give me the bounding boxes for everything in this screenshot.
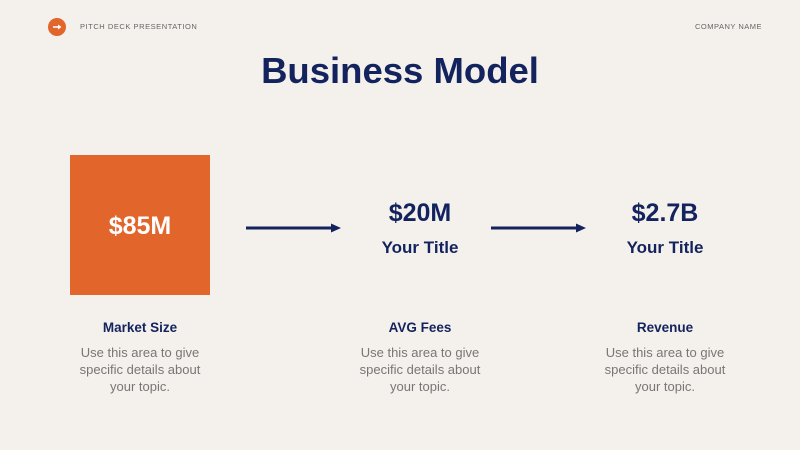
arrow 2 (491, 224, 586, 232)
text block: revenue: specific details about (605, 362, 725, 377)
text block: revenue: your topic. (635, 379, 695, 394)
subtitle 1: Your Title (382, 238, 458, 257)
text block: avg fees (360, 320, 480, 394)
panel: market size (70, 155, 210, 295)
text block: revenue: Revenue (637, 320, 693, 335)
subtitle 2: Your Title (627, 238, 703, 257)
text block: market size: Market Size (103, 320, 177, 335)
text block: market size: Use this area to give (81, 345, 199, 360)
header label: PITCH DECK PRESENTATION (80, 22, 197, 31)
value: $85M (109, 212, 171, 240)
text block: avg fees: specific details about (360, 362, 480, 377)
title: Business Model (261, 50, 539, 91)
text block: avg fees: Use this area to give (361, 345, 479, 360)
text block: market size: specific details about (80, 362, 200, 377)
text block: avg fees: your topic. (390, 379, 450, 394)
text block: avg fees: AVG Fees (389, 320, 451, 335)
value: $20M: $20M (389, 199, 451, 227)
icon: header arrow circle (48, 18, 66, 36)
text block: market size: your topic. (110, 379, 170, 394)
value: $2.7B: $2.7B (632, 199, 698, 227)
company name: COMPANY NAME (695, 22, 762, 31)
text block: market size (80, 320, 200, 394)
text block: revenue: Use this area to give (606, 345, 724, 360)
text block: revenue (605, 320, 726, 394)
arrow 1 (246, 224, 341, 232)
